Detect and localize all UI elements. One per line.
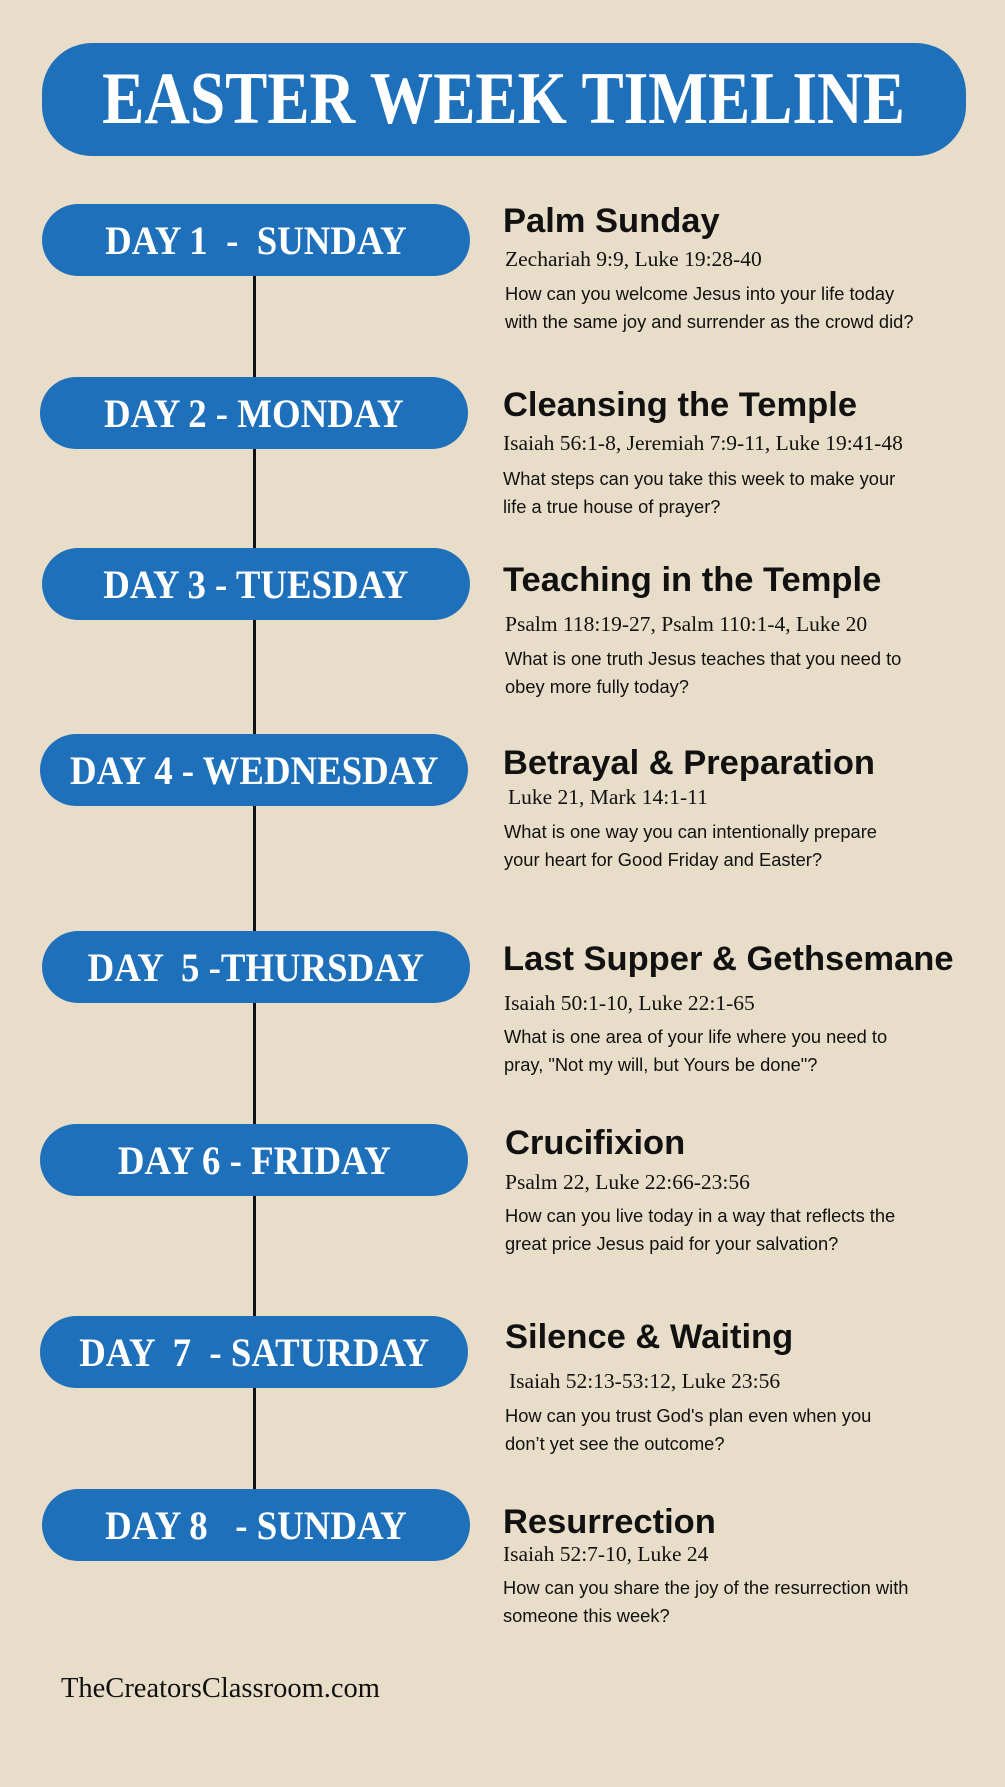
pill: day 7: DAY 7 - SATURDAY (79, 1330, 429, 1374)
block: resurrection: Resurrection (503, 1503, 716, 1541)
pill: day 7 (40, 1316, 468, 1388)
block: last supper & gethsemane: What is one area of your life where you need to (504, 1026, 887, 1047)
block: resurrection: How can you share the joy of the resurrection with (503, 1577, 908, 1598)
pill: day 4: DAY 4 - WEDNESDAY (70, 748, 438, 792)
block: betrayal & preparation: What is one way you can intentionally prepare (504, 821, 877, 842)
block: betrayal & preparation: Luke 21, Mark 14:1-11 (508, 785, 708, 809)
block: last supper & gethsemane: Last Supper & Gethsemane (503, 940, 954, 978)
block: silence & waiting: Silence & Waiting (505, 1318, 793, 1356)
block: last supper & gethsemane (503, 940, 954, 1075)
block: cleansing the temple: Cleansing the Temple (503, 386, 857, 424)
block: palm sunday: with the same joy and surrender as the crowd did? (505, 311, 914, 332)
block: resurrection (503, 1503, 908, 1626)
text: life a true house of prayer? (503, 496, 720, 517)
pill: day 8: DAY 8 - SUNDAY (105, 1502, 407, 1548)
block: resurrection: Isaiah 52:7-10, Luke 24 (503, 1542, 708, 1566)
title banner: EASTER WEEK TIMELINE (103, 58, 905, 140)
pill: day 2 (40, 377, 468, 449)
block: resurrection: someone this week? (503, 1605, 670, 1626)
block: crucifixion: great price Jesus paid for your salvation? (505, 1233, 838, 1254)
block: cleansing the temple (503, 386, 903, 517)
pill: day 1: DAY 1 - SUNDAY (105, 218, 407, 262)
block: silence & waiting: Isaiah 52:13-53:12, Luke 23:56 (509, 1369, 780, 1393)
block: palm sunday: Zechariah 9:9, Luke 19:28-40 (505, 247, 762, 271)
block: betrayal & preparation: Betrayal & Preparation (503, 744, 875, 782)
block: cleansing the temple: What steps can you take this week to make your (503, 468, 895, 489)
pill: day 1 (42, 204, 470, 276)
block: teaching in the temple: Psalm 118:19-27, Psalm 110:1-4, Luke 20 (505, 612, 867, 636)
text: don’t yet see the outcome? (505, 1433, 725, 1454)
block: betrayal & preparation (503, 744, 877, 870)
pill: day 4 (40, 734, 468, 806)
pill: day 3: DAY 3 - TUESDAY (103, 562, 409, 606)
pill: day 6 (40, 1124, 468, 1196)
block: silence & waiting: How can you trust God's plan even when you (505, 1405, 871, 1426)
block: palm sunday: How can you welcome Jesus into your life today (505, 283, 894, 304)
block: teaching in the temple (503, 561, 901, 697)
title banner (42, 43, 966, 156)
block: crucifixion: How can you live today in a way that reflects the (505, 1205, 895, 1226)
pill: day 2: DAY 2 - MONDAY (104, 390, 404, 436)
block: palm sunday (503, 202, 914, 332)
pill: day 5: DAY 5 -THURSDAY (88, 944, 424, 990)
timeline line (253, 240, 256, 1530)
block: crucifixion: Crucifixion (505, 1124, 685, 1162)
block: crucifixion (505, 1124, 895, 1254)
pill: day 6: DAY 6 - FRIDAY (118, 1138, 390, 1182)
pill: day 3 (42, 548, 470, 620)
pill: day 5 (42, 931, 470, 1003)
footer: website: TheCreatorsClassroom.com (61, 1673, 380, 1704)
block: teaching in the temple: What is one truth Jesus teaches that you need to (505, 648, 901, 669)
text: pray, "Not my will, but Yours be done"? (504, 1054, 817, 1075)
block: cleansing the temple: Isaiah 56:1-8, Jeremiah 7:9-11, Luke 19:41-48 (503, 431, 903, 455)
text: obey more fully today? (505, 676, 689, 697)
block: palm sunday: Palm Sunday (503, 202, 720, 240)
block: betrayal & preparation: your heart for Good Friday and Easter? (504, 849, 822, 870)
block: crucifixion: Psalm 22, Luke 22:66-23:56 (505, 1170, 750, 1194)
block: silence & waiting (505, 1318, 871, 1454)
block: last supper & gethsemane: Isaiah 50:1-10, Luke 22:1-65 (504, 991, 755, 1015)
pill: day 8 (42, 1489, 470, 1561)
block: teaching in the temple: Teaching in the Temple (503, 561, 881, 599)
